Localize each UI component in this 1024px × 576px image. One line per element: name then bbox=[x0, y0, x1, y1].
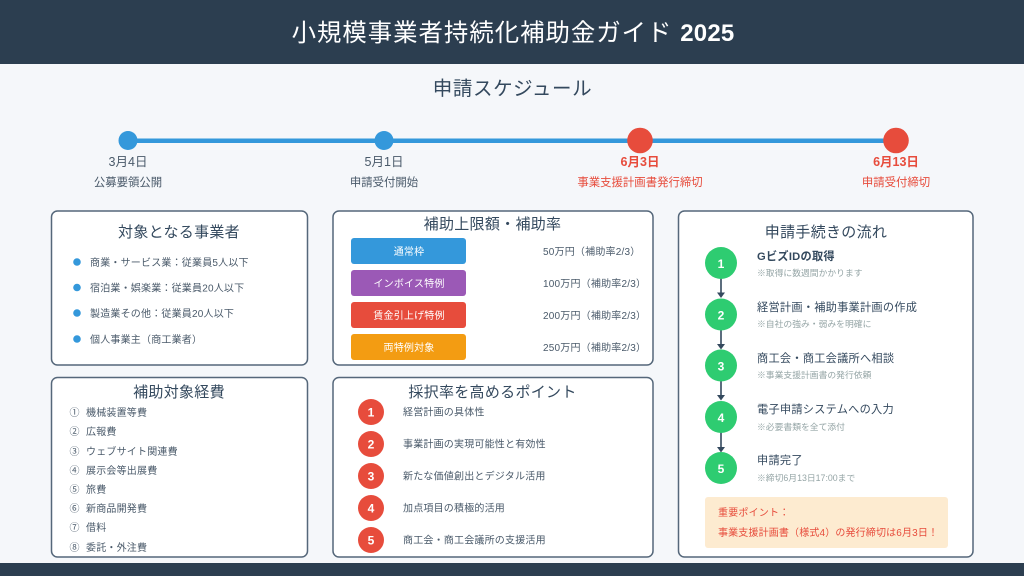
row: 両特例対象: 250万円（補助率2/3） bbox=[543, 341, 646, 354]
point 4: 加点項目の積極的活用 bbox=[403, 502, 505, 514]
step 5: ※締切6月13日17:00まで bbox=[757, 472, 855, 483]
milestone: 3月4日: 3月4日 bbox=[109, 155, 147, 169]
step 3: ※事業支援計画書の発行依頼 bbox=[757, 369, 872, 380]
step 4: 4 bbox=[718, 411, 725, 425]
expense list: ② bbox=[70, 426, 80, 438]
header band bbox=[0, 0, 1024, 64]
expense list: ③ bbox=[70, 446, 80, 458]
expense list: 広報費 bbox=[86, 425, 117, 438]
milestone: 5月1日: 申請受付開始 bbox=[350, 175, 419, 189]
point 1 bbox=[358, 399, 485, 425]
row: 賃金引上げ特例 bbox=[351, 302, 646, 328]
list item 2: 宿泊業・娯楽業：従業員20人以下 bbox=[90, 282, 244, 294]
step 4 bbox=[705, 401, 894, 433]
point 5 bbox=[358, 527, 546, 553]
step 3: 3 bbox=[718, 360, 725, 374]
expense list: 新商品開発費 bbox=[86, 502, 147, 515]
callout: important point: 重要ポイント： bbox=[718, 506, 789, 519]
point 1: 経営計画の具体性 bbox=[403, 406, 485, 418]
expense list: ウェブサイト関連費 bbox=[86, 445, 178, 458]
expense list: ⑧ bbox=[70, 542, 80, 554]
expense list: 委託・外注費 bbox=[86, 541, 147, 554]
expense list: 展示会等出展費 bbox=[86, 464, 157, 477]
panel: 申請手続きの流れ bbox=[678, 211, 973, 557]
panel: 対象となる事業者 bbox=[52, 211, 308, 365]
expense list: ① bbox=[70, 407, 80, 419]
step 5: 申請完了 bbox=[757, 453, 803, 467]
row: インボイス特例 bbox=[351, 270, 646, 296]
heading: 対象となる事業者 bbox=[118, 224, 240, 241]
row: インボイス特例: インボイス特例 bbox=[373, 277, 445, 290]
milestone: 5月1日: 5月1日 bbox=[365, 155, 403, 169]
point 3: 新たな価値創出とデジタル活用 bbox=[403, 470, 546, 482]
row: 賃金引上げ特例: 賃金引上げ特例 bbox=[373, 309, 445, 322]
milestone: 6月3日: 6月3日 bbox=[621, 155, 659, 169]
heading: 補助対象経費 bbox=[133, 384, 225, 401]
title: 小規模事業者持続化補助金ガイド 2025 bbox=[292, 20, 734, 47]
expense list: 借料 bbox=[86, 521, 106, 534]
step 3 bbox=[705, 350, 894, 382]
panel: 補助対象経費 bbox=[52, 378, 308, 557]
step 5 bbox=[705, 452, 855, 484]
list item 1: 商業・サービス業：従業員5人以下 bbox=[90, 256, 249, 269]
panel: 採択率を高めるポイント bbox=[333, 378, 653, 557]
expense list: ⑥ bbox=[70, 503, 80, 515]
step 5: 5 bbox=[718, 462, 725, 476]
point 5: 5 bbox=[368, 534, 375, 548]
schedule heading: 申請スケジュール bbox=[433, 78, 592, 100]
point 1: 1 bbox=[368, 406, 375, 420]
point 2: 事業計画の実現可能性と有効性 bbox=[403, 438, 546, 450]
expense list: ④ bbox=[70, 465, 80, 477]
callout: important point bbox=[705, 497, 948, 548]
milestone: 3月4日 bbox=[94, 131, 162, 189]
row: 通常枠: 50万円（補助率2/3） bbox=[543, 245, 640, 258]
panel: 補助上限額・補助率 bbox=[333, 211, 653, 365]
expense list: ⑤ bbox=[70, 484, 80, 496]
heading: 採択率を高めるポイント bbox=[408, 384, 577, 401]
row: 賃金引上げ特例: 200万円（補助率2/3） bbox=[543, 309, 646, 322]
row: インボイス特例: 100万円（補助率2/3） bbox=[543, 277, 646, 290]
point 3 bbox=[358, 463, 546, 489]
milestone: 3月4日: 公募要領公開 bbox=[94, 175, 162, 189]
step 2 bbox=[705, 298, 917, 330]
list item 4: 個人事業主（商工業者） bbox=[90, 333, 202, 346]
step 1: 1 bbox=[718, 257, 725, 271]
milestone: 6月13日: 申請受付締切 bbox=[862, 175, 930, 189]
point 4: 4 bbox=[368, 502, 375, 516]
step 3: 商工会・商工会議所へ相談 bbox=[757, 351, 894, 365]
milestone: 6月13日 bbox=[862, 128, 930, 189]
expense list: 旅費 bbox=[86, 483, 106, 496]
footer band bbox=[0, 563, 1024, 576]
milestone: 6月3日: 事業支援計画書発行締切 bbox=[577, 175, 703, 189]
step 4: 電子申請システムへの入力 bbox=[757, 402, 894, 416]
schedule timeline bbox=[94, 128, 930, 189]
expense list bbox=[70, 406, 178, 554]
milestone: 5月1日 bbox=[350, 131, 419, 189]
point 5: 商工会・商工会議所の支援活用 bbox=[403, 534, 546, 546]
row: 通常枠 bbox=[351, 238, 640, 264]
point 3: 3 bbox=[368, 470, 375, 484]
step 1 bbox=[705, 247, 863, 279]
milestone: 6月3日 bbox=[577, 128, 703, 189]
callout: important point: 事業支援計画書（様式4）の発行締切は6月3日！ bbox=[718, 526, 938, 539]
point 2 bbox=[358, 431, 546, 457]
step 2: 2 bbox=[718, 308, 725, 322]
step 2: ※自社の強み・弱みを明確に bbox=[757, 318, 871, 329]
list item 3: 製造業その他：従業員20人以下 bbox=[90, 307, 234, 320]
point 2: 2 bbox=[368, 438, 375, 452]
row: 両特例対象 bbox=[351, 334, 646, 360]
milestone: 6月13日: 6月13日 bbox=[873, 155, 919, 169]
step 4: ※必要書類を全て添付 bbox=[757, 421, 845, 432]
heading: 補助上限額・補助率 bbox=[424, 216, 561, 233]
step 2: 経営計画・補助事業計画の作成 bbox=[757, 300, 917, 314]
row: 両特例対象: 両特例対象 bbox=[384, 341, 434, 354]
expense list: 機械装置等費 bbox=[86, 406, 147, 419]
step 1: ※取得に数週間かかります bbox=[757, 267, 863, 278]
heading: 申請手続きの流れ bbox=[765, 224, 887, 241]
step 1: GビズIDの取得 bbox=[757, 249, 835, 263]
row: 通常枠: 通常枠 bbox=[394, 245, 424, 258]
connector arrows bbox=[717, 278, 725, 452]
point 4 bbox=[358, 495, 505, 521]
expense list: ⑦ bbox=[70, 522, 80, 534]
